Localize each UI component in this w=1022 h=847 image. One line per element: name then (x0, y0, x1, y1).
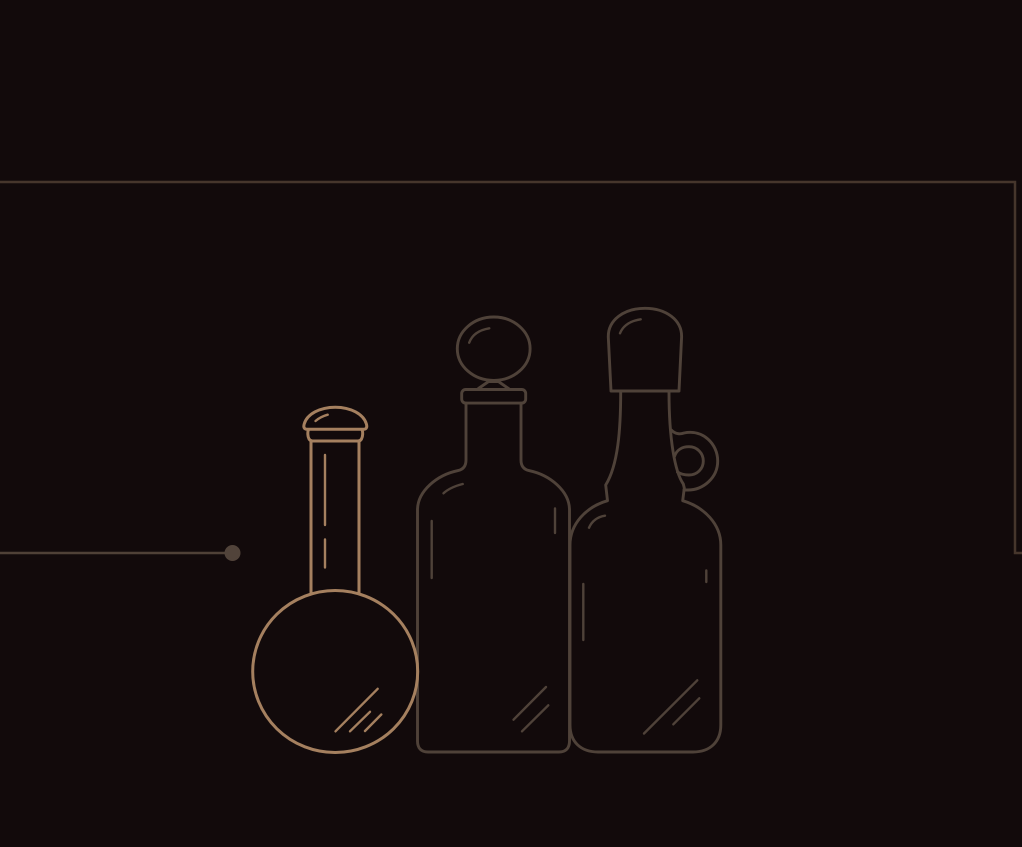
stopper highlight (469, 328, 489, 343)
bottle: round stopper decanter (418, 317, 570, 752)
bottle: round flask highlighted (253, 407, 418, 752)
flask neck (311, 441, 359, 593)
handle inner (674, 447, 703, 475)
bottle: corked jug with handle (570, 308, 721, 752)
flask collar (308, 430, 363, 441)
handle outer (671, 430, 718, 490)
jug outline (570, 392, 721, 752)
stopper ball (457, 317, 530, 380)
cap highlight (316, 415, 328, 421)
flask cap (304, 407, 367, 429)
collar (462, 390, 526, 403)
flask body (253, 590, 418, 752)
glass highlights (325, 455, 381, 731)
connector: left line with dot (0, 545, 240, 561)
stopper base (478, 382, 508, 388)
frame line: top and right connector (0, 182, 1022, 553)
cork highlight (620, 319, 641, 333)
body outline (418, 403, 570, 752)
glass highlights (583, 516, 706, 734)
glass highlights (432, 484, 555, 731)
cork (608, 308, 682, 391)
